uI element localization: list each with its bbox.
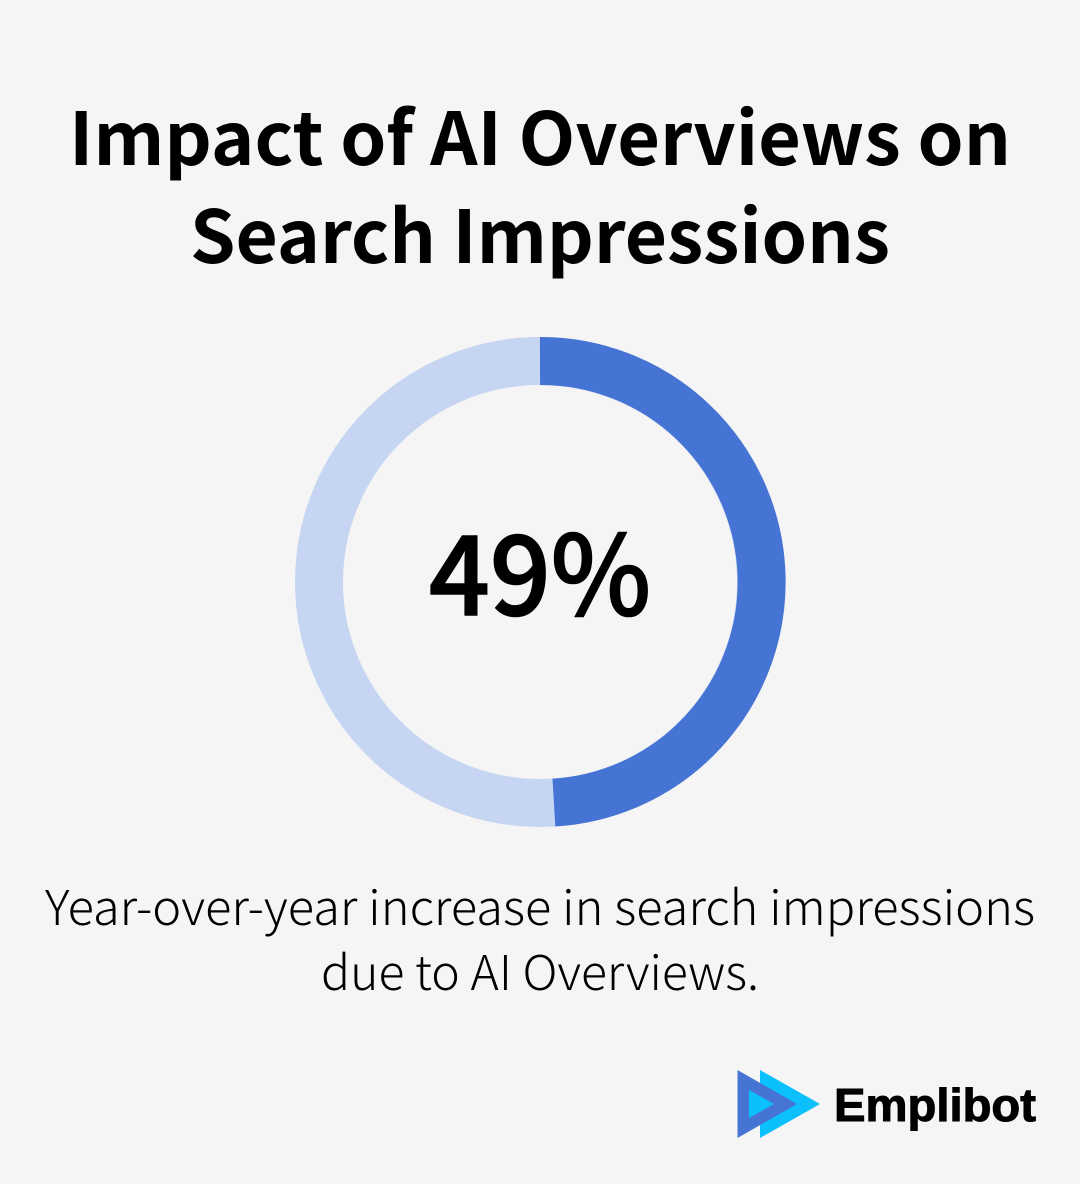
caption: due to AI Overviews. xyxy=(321,934,759,1004)
title: Search Impressions xyxy=(190,179,890,285)
caption: Year-over-year increase in search impressions xyxy=(45,869,1035,939)
title xyxy=(69,81,1011,285)
icon: play triangles xyxy=(738,1070,820,1138)
caption xyxy=(45,869,1035,1004)
title: Impact of AI Overviews on xyxy=(69,81,1011,187)
logo: Emplibot xyxy=(738,1070,1036,1138)
big number: 49% xyxy=(429,487,651,647)
logo wordmark: Emplibot xyxy=(834,1079,1036,1131)
donut chart: 49% xyxy=(319,361,762,803)
